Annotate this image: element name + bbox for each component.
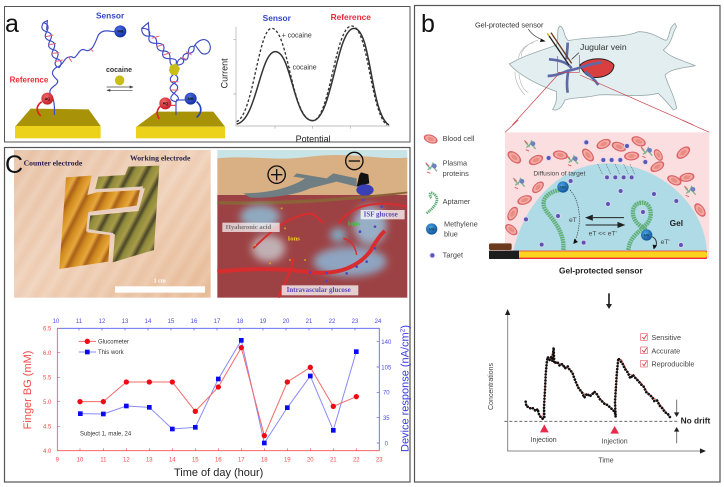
series: glucometer — [77, 345, 359, 438]
sensor probe — [547, 33, 572, 65]
top axis labels: 13 — [122, 319, 129, 325]
curve: minus cocaine — [237, 28, 389, 125]
fluid regions — [240, 205, 387, 277]
blood vessels — [217, 204, 407, 298]
label: diffusion of target: Diffusion of target — [533, 171, 586, 178]
veins — [548, 43, 602, 93]
legend: aptamer — [427, 193, 471, 213]
legend: plasma proteins: Plasma — [443, 159, 468, 168]
equilibrium arrows — [107, 86, 133, 91]
no drift arrows — [674, 400, 679, 443]
bottom axis labels: 14 — [169, 457, 176, 463]
minus electrode symbol — [346, 152, 363, 170]
axes — [508, 313, 702, 451]
icon: MB redox sphere right: MB — [188, 97, 194, 101]
label: Ions green: Ions — [348, 220, 360, 227]
legend: blood cell: Blood cell — [443, 134, 475, 143]
zoom box lines — [512, 55, 693, 125]
icon: AQ redox sphere right: AQ — [163, 102, 168, 106]
illustration: skin cross-section — [217, 150, 407, 298]
icon: MB bound: MB — [644, 233, 650, 237]
bottom axis labels: 12 — [123, 457, 130, 463]
gel-protected sensor diagram — [422, 132, 709, 276]
counter electrode foil — [59, 176, 142, 269]
axis title: Time: Time — [598, 457, 614, 464]
icon: MB bound — [641, 229, 652, 241]
legend: target — [429, 251, 463, 260]
axis title: Time of day: Time of day (hour) — [174, 467, 263, 479]
top axis labels — [53, 319, 382, 325]
diffusion arrows — [598, 164, 635, 174]
bottom axis labels: 22 — [353, 457, 360, 463]
bottom axis labels: 16 — [215, 457, 222, 463]
zoom connector top — [505, 120, 709, 132]
series: this work — [78, 338, 359, 445]
panel: c — [4, 148, 410, 482]
labels: eT — [569, 217, 670, 246]
DNA strands right — [142, 23, 210, 115]
aptamer folded — [628, 203, 651, 250]
label: Ions yellow: Ions — [288, 236, 300, 243]
icon: cocaine bound — [169, 63, 180, 75]
icon: cocaine molecule — [115, 75, 124, 85]
scale bar: 1 cm — [154, 278, 166, 284]
right axis labels: 105 — [381, 365, 392, 371]
gel dome — [513, 163, 707, 251]
checklist — [641, 333, 695, 368]
axis arrowheads — [505, 309, 706, 454]
plus electrode symbol — [268, 166, 285, 183]
icon: AQ redox sphere right — [157, 97, 175, 119]
bottom axis labels: 19 — [284, 457, 291, 463]
bottom axis labels: 15 — [192, 457, 199, 463]
left axis labels — [43, 327, 52, 455]
icon: AQ redox sphere left — [37, 93, 53, 116]
working electrode foil — [87, 166, 159, 262]
label: injection 2: Injection — [602, 439, 628, 446]
diagram: reference and sensor before cocaine — [10, 10, 225, 138]
grey electrode trace — [243, 173, 357, 198]
legend: blood cell — [422, 133, 475, 145]
label: ISF glucose: ISF glucose — [364, 211, 398, 219]
label: Working electrode: Working electrode — [130, 154, 191, 163]
label: Jugular vein: Jugular vein — [580, 42, 627, 52]
icon: MB redox sphere right — [185, 93, 201, 117]
legend: aptamer: Aptamer — [443, 197, 471, 206]
bottom axis labels: 20 — [307, 457, 314, 463]
glucose markers — [309, 199, 383, 282]
panel b letter: b — [421, 10, 435, 38]
panel: b — [414, 6, 720, 482]
tick marks — [57, 328, 356, 451]
bottom axis labels: 17 — [238, 457, 245, 463]
right axis labels: 70 — [383, 391, 390, 397]
right axis labels: 0 — [385, 441, 389, 447]
top axis labels: 23 — [352, 319, 359, 325]
scale bar — [115, 278, 205, 293]
top axis labels: 11 — [76, 319, 83, 325]
axis title: Device response: 2 — [399, 328, 406, 332]
photo: electrode on skin — [14, 150, 211, 298]
left axis labels: 5.0 — [43, 400, 52, 406]
sensor contact — [356, 172, 374, 196]
axis title: Device response: Device response (nA/cm — [399, 332, 411, 452]
top axis labels: 24 — [375, 319, 382, 325]
top axis labels: 18 — [237, 319, 244, 325]
bottom axis labels: 10 — [77, 457, 84, 463]
top axis labels: 12 — [99, 319, 106, 325]
top axis labels: 20 — [283, 319, 290, 325]
left axis labels: 4.5 — [43, 424, 52, 430]
electron transfer arrows — [570, 190, 657, 249]
top axis labels: 14 — [145, 319, 152, 325]
legend: plasma proteins — [426, 159, 469, 178]
bottom axis labels: 21 — [330, 457, 337, 463]
top axis labels: 19 — [260, 319, 267, 325]
illustration: rat with sensor — [475, 20, 695, 125]
curve: plus cocaine — [237, 26, 387, 125]
whiskers — [515, 40, 538, 95]
label: ISF glucose — [361, 210, 405, 219]
icon: MB redox sphere left — [114, 25, 126, 37]
aptamer unfolded — [544, 190, 563, 250]
top axis labels: 10 — [53, 319, 60, 325]
equilibrium arrows — [586, 215, 624, 227]
label: Intravascular glucose: Intravascular glucose — [287, 286, 351, 294]
label: Hyaluronic acid: Hyaluronic acid — [226, 224, 272, 231]
arrow: down to chart — [606, 293, 612, 309]
trace points — [526, 348, 670, 419]
label: minus cocaine: - cocaine — [288, 65, 317, 72]
voltammogram chart — [219, 12, 390, 144]
icon: MB free — [557, 181, 569, 193]
label: Gel: Gel — [670, 218, 683, 228]
axis title: Concentrations: Concentrations — [488, 363, 495, 410]
bottom axis labels — [56, 457, 383, 463]
axis title: Potential: Potential — [296, 134, 331, 144]
line chart: finger BG and device response — [22, 319, 411, 479]
dermis — [217, 195, 407, 298]
top axis labels: 21 — [306, 319, 313, 325]
top axis labels: 17 — [214, 319, 221, 325]
plasma proteins — [513, 140, 696, 197]
right axis labels — [381, 340, 392, 447]
ion markers — [254, 207, 306, 264]
DNA strands left — [42, 21, 115, 115]
right axis labels: 140 — [381, 340, 392, 346]
icon: MB redox sphere left: MB — [117, 30, 124, 34]
heart — [580, 59, 614, 77]
bottom axis labels: 13 — [146, 457, 153, 463]
bottom axis labels: 23 — [376, 457, 383, 463]
baseline dashed — [504, 420, 679, 423]
annotation: subject: Subject 1, male, 24 — [80, 431, 132, 437]
electrode slits — [87, 188, 142, 234]
targets — [523, 139, 684, 248]
panel c letter: C — [5, 151, 23, 179]
chart: no drift concentrations — [488, 309, 710, 464]
axis title: Finger BG: Finger BG (mM) — [22, 351, 34, 429]
icon: MB free: MB — [560, 185, 566, 189]
left axis labels: 6.5 — [43, 327, 52, 333]
axis title: Current: Current — [219, 58, 229, 88]
tick marks blue — [79, 328, 379, 443]
electrode — [489, 243, 707, 259]
label: Reference: Reference — [331, 12, 371, 22]
gold electrode right — [136, 112, 225, 138]
left axis labels: 4.0 — [43, 449, 52, 455]
legend: methylene blue — [426, 220, 478, 239]
legend: methylene blue: blue — [444, 230, 458, 239]
legend: plasma proteins: proteins — [443, 169, 469, 178]
plot frame — [57, 328, 379, 451]
left axis labels: 5.5 — [43, 375, 52, 381]
labels: eT: eT << eT' — [589, 231, 617, 238]
right axis labels: 35 — [383, 416, 390, 422]
label: Sensor: Sensor — [96, 10, 125, 20]
label: Intravascular glucose — [282, 285, 358, 295]
heading: Gel-protected sensor: Gel-protected sensor — [559, 266, 644, 276]
label: Gel-protected sensor: Gel-protected sensor — [475, 20, 544, 29]
label: cocaine: cocaine — [106, 67, 132, 74]
labels: eT: eT' — [661, 239, 670, 246]
labels: eT: eT — [569, 217, 577, 224]
legend: This work — [98, 350, 124, 356]
gold electrode left — [15, 109, 101, 138]
top axis labels: 15 — [168, 319, 175, 325]
checklist: Reproducible — [651, 359, 695, 368]
bottom axis labels: 9 — [56, 457, 60, 463]
blood cells — [503, 134, 708, 238]
checklist: Sensitive — [651, 333, 681, 342]
left axis labels: 6.0 — [43, 351, 52, 357]
icon: AQ redox sphere left: AQ — [45, 97, 50, 101]
rat body — [509, 23, 695, 110]
legend: target: Target — [443, 251, 463, 260]
injection markers — [540, 424, 619, 434]
label: Counter electrode: Counter electrode — [24, 158, 83, 167]
blood background — [505, 132, 709, 258]
label: injection 1: Injection — [531, 437, 557, 444]
legend: methylene blue: MB — [429, 227, 435, 231]
checklist: Accurate — [651, 346, 680, 355]
label: Gel-protected sensor — [475, 20, 546, 42]
label: No drift: No drift — [681, 416, 710, 426]
label: Jugular vein — [572, 42, 627, 59]
label: plus cocaine: + cocaine — [282, 33, 312, 40]
axes — [233, 27, 390, 129]
top axis labels: 16 — [191, 319, 198, 325]
label: Sensor: Sensor — [263, 13, 292, 23]
legend: Glucometer — [98, 339, 129, 345]
panel a letter: a — [5, 10, 19, 38]
epidermis — [217, 155, 407, 195]
axis title: Device response: ) — [399, 325, 411, 329]
sky — [217, 150, 407, 163]
legend — [79, 339, 129, 356]
bottom axis labels: 18 — [261, 457, 268, 463]
label: Hyaluronic acid — [222, 223, 280, 232]
top axis labels: 22 — [329, 319, 336, 325]
bottom axis labels: 11 — [100, 457, 107, 463]
trace line — [526, 348, 670, 419]
panel: a — [4, 6, 410, 142]
legend: methylene blue: Methylene — [444, 220, 478, 229]
label: Reference: Reference — [10, 76, 49, 85]
